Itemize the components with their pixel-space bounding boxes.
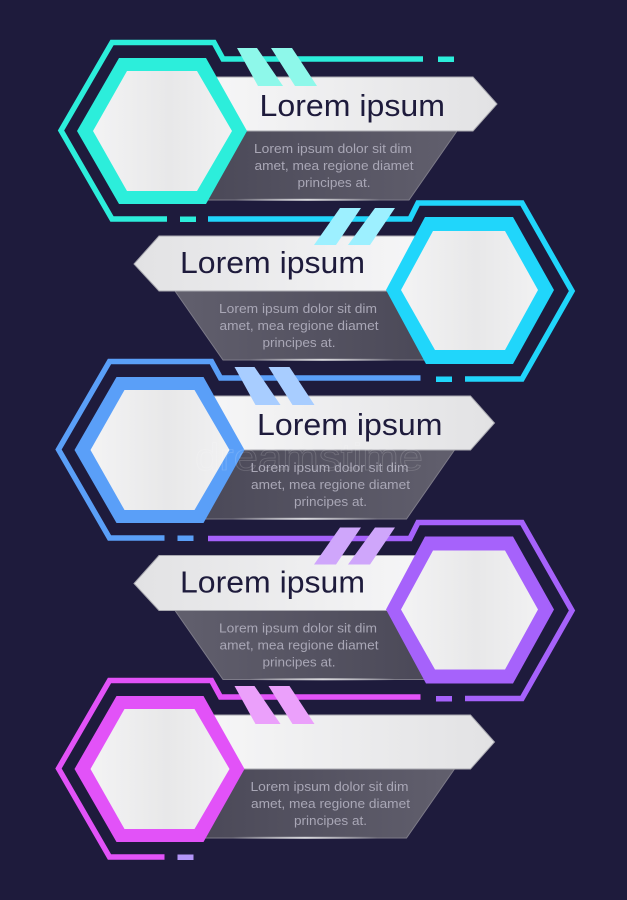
body text 2: Lorem ipsum dolor sit dim <box>219 301 377 316</box>
hexagon center 4 <box>401 550 538 670</box>
panel: item 2 cyan <box>134 203 572 382</box>
title banner 2 <box>134 236 420 291</box>
body text 1: amet, mea regione diamet <box>254 158 414 173</box>
accent stripes 4 <box>314 528 395 564</box>
panel highlight 2 <box>250 359 395 361</box>
outer frame line 4 <box>208 522 572 698</box>
body text 4: principes at. <box>262 654 336 670</box>
body text 5: amet, mea regione diamet <box>251 796 410 811</box>
accent stripes 2 <box>314 208 395 245</box>
hexagon center 3 <box>90 390 230 510</box>
accent stripes 1 <box>237 48 317 86</box>
hexagon ring 2 <box>386 217 554 364</box>
body text 2: principes at. <box>262 335 336 350</box>
body text 4 <box>219 620 379 670</box>
body text 3: amet, mea regione diamet <box>251 477 410 492</box>
body text 1: Lorem ipsum dolor sit dim <box>254 141 412 156</box>
body text 3 <box>250 460 410 509</box>
hexagon center 5 <box>90 709 230 829</box>
accent stripes 3 <box>234 367 314 405</box>
body text 4: Lorem ipsum dolor sit dim <box>219 620 377 636</box>
body text 4: amet, mea regione diamet <box>220 638 379 652</box>
outer frame line 1 <box>61 42 423 219</box>
body text 5: Lorem ipsum dolor sit dim <box>250 779 408 794</box>
outer frame line 5 <box>58 680 420 857</box>
body text 5 <box>250 779 410 828</box>
dash bottom 4 <box>436 696 452 702</box>
panel highlight 3 <box>232 518 378 520</box>
panel highlight 4 <box>250 678 395 680</box>
panel highlight 5 <box>232 837 378 839</box>
title banner 5 <box>208 715 494 769</box>
body text 2 <box>219 301 379 350</box>
hexagon ring 1 <box>77 58 247 204</box>
body text 2: amet, mea regione diamet <box>220 318 379 333</box>
panel: item 4 purple <box>134 522 572 702</box>
dash bottom 3 <box>178 536 194 541</box>
dash bottom 5 <box>178 854 194 860</box>
dash top 1 <box>438 56 454 62</box>
hexagon center 2 <box>401 231 538 350</box>
description panel 1 <box>207 131 457 200</box>
title banner 4 <box>134 556 420 610</box>
dash bottom 2 <box>436 376 452 382</box>
description panel 2 <box>175 291 425 360</box>
title banner 1 <box>210 77 497 131</box>
heading 3: Lorem ipsum <box>257 407 442 442</box>
title banner 3 <box>208 396 494 450</box>
description panel 4 <box>175 610 425 680</box>
dash bottom 1 <box>180 216 196 222</box>
panel highlight 1 <box>235 199 380 201</box>
hexagon ring 3 <box>74 377 244 523</box>
panel: item 1 teal <box>61 42 497 222</box>
outer frame line 3 <box>58 362 420 538</box>
description panel 3 <box>204 450 454 519</box>
panel: item 3 blue <box>58 362 494 541</box>
body text 1: principes at. <box>298 175 370 190</box>
body text 1 <box>254 141 414 190</box>
description panel 5 <box>204 769 454 838</box>
outer frame line 2 <box>208 203 572 379</box>
heading 2: Lorem ipsum <box>180 245 365 280</box>
watermark: dreamstime <box>195 437 423 479</box>
hexagon ring 4 <box>386 536 554 684</box>
panel: item 5 magenta <box>58 680 494 860</box>
hexagon center 1 <box>93 71 232 191</box>
body text 5: principes at. <box>294 813 367 828</box>
hexagon ring 5 <box>74 696 244 842</box>
body text 3: principes at. <box>294 494 367 509</box>
accent stripes 5 <box>234 686 314 724</box>
body text 3: Lorem ipsum dolor sit dim <box>250 460 408 475</box>
heading 4: Lorem ipsum <box>180 564 365 600</box>
heading 1: Lorem ipsum <box>260 88 445 123</box>
